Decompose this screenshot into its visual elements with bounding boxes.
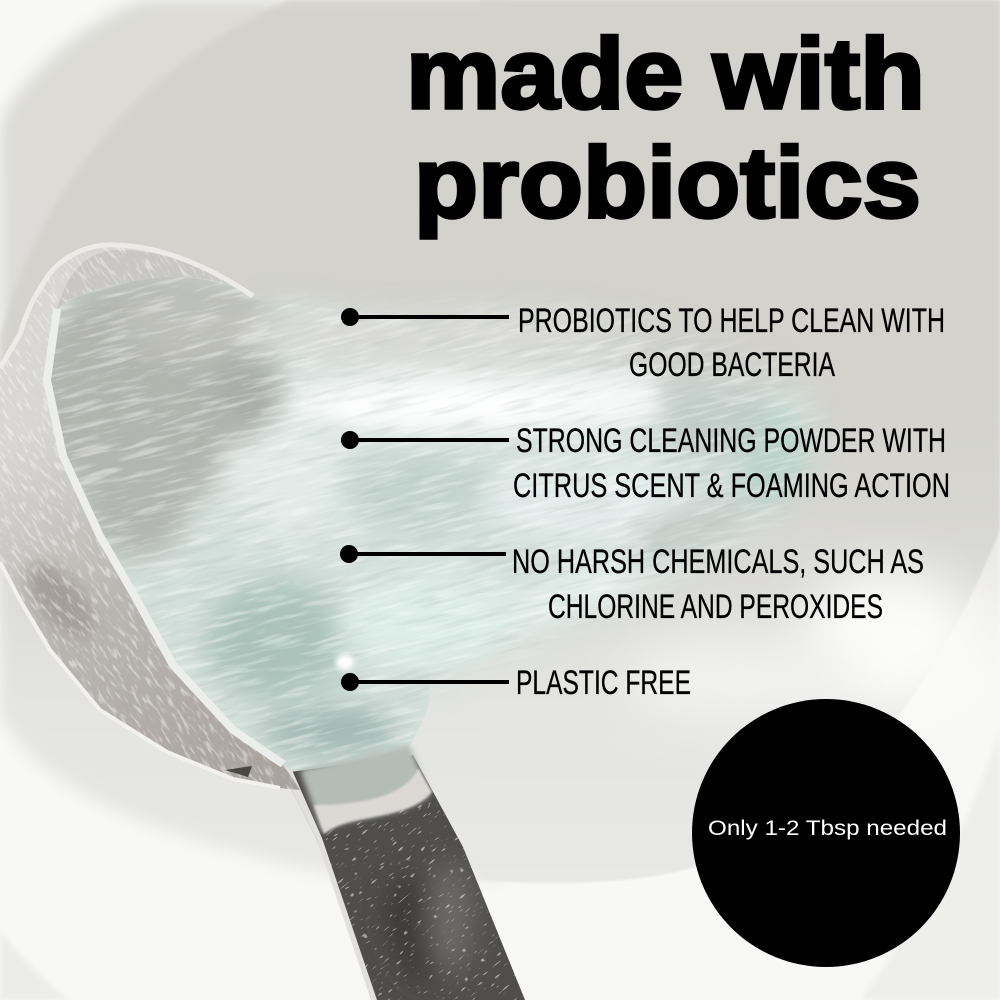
scoop metal bowl (0, 245, 300, 790)
callout: plastic free (341, 664, 691, 702)
callout: probiotics: GOOD BACTERIA (629, 346, 835, 384)
title: probiotics (414, 127, 921, 239)
callout: probiotics (341, 302, 945, 384)
title (406, 18, 925, 239)
badge: dosage: Only 1-2 Tbsp needed (708, 817, 947, 840)
callout: plastic free: PLASTIC FREE (516, 664, 691, 702)
callout: no harsh chemicals (340, 543, 924, 626)
powder spilling from scoop (51, 277, 820, 772)
callout: no harsh chemicals: CHLORINE AND PEROXIDES (548, 588, 883, 626)
title: made with (406, 18, 925, 130)
scoop handle (283, 745, 525, 1000)
callout: cleaning powder (341, 422, 950, 505)
badge: dosage (692, 699, 960, 967)
